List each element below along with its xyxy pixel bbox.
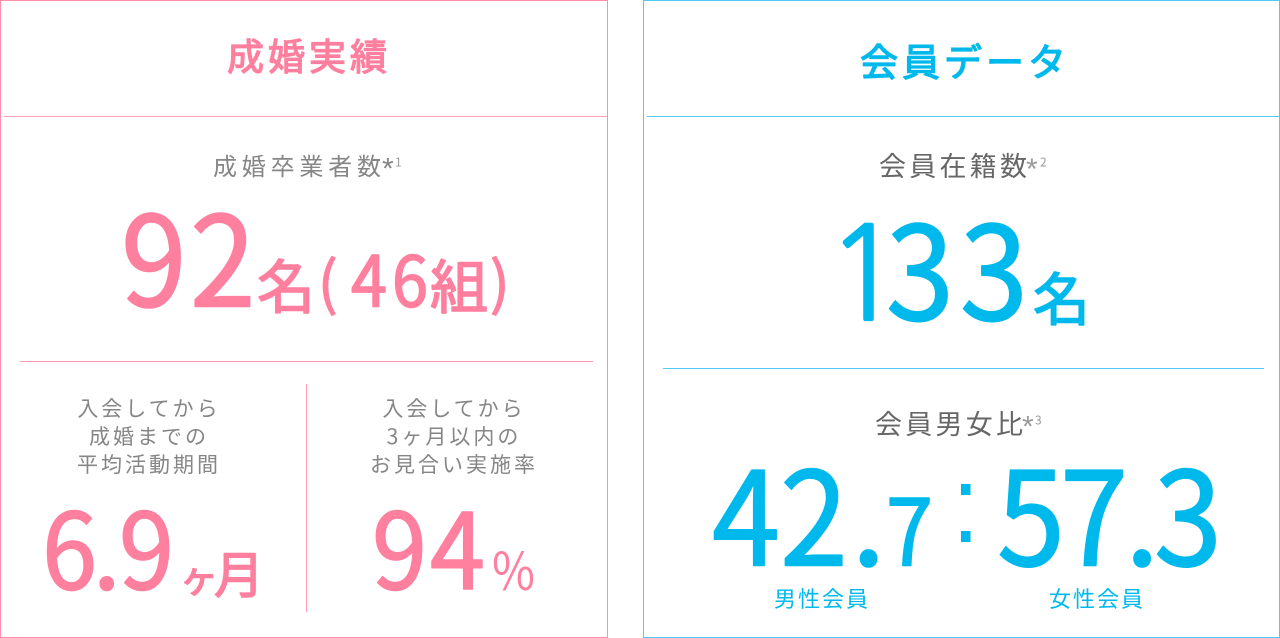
- stat: 92名(46組): 名: [257, 241, 315, 325]
- label: 平均活動期間: [77, 393, 221, 479]
- stat: 92名(46組): [121, 162, 510, 342]
- stat: 133名: 3: [960, 170, 1028, 358]
- label: お見合い実施率: 3ヶ月以内の: [387, 421, 521, 451]
- stat: 57.3 female ratio: 7: [1060, 416, 1128, 604]
- stat: 6.9ヶ月: 9: [119, 468, 174, 620]
- label: 会員在籍数: *: [1026, 153, 1038, 186]
- label: 会員在籍数: 会員在籍数: [879, 145, 1027, 184]
- stat: 92名(46組): 6: [392, 226, 428, 328]
- stat: 6.9ヶ月: ヶ: [180, 548, 218, 603]
- stat: 57.3 female ratio: .: [1125, 424, 1159, 602]
- stat: 133名: 名: [1033, 255, 1090, 337]
- stat: 57.3 female ratio: 5: [997, 416, 1065, 604]
- stat: 94%: [372, 468, 535, 620]
- stat: 92名(46組): 2: [190, 162, 256, 342]
- heading: 会員データ: 会員データ: [860, 32, 1066, 87]
- stat: 94%: 4: [430, 468, 485, 620]
- panel: 会員データ: [644, 0, 1280, 638]
- stat: 42.7 male ratio: 2: [780, 416, 848, 604]
- label: 平均活動期間: 成婚までの: [89, 421, 209, 451]
- label: 成婚卒業者数: 1: [395, 154, 402, 170]
- label: 平均活動期間: 平均活動期間: [77, 449, 221, 479]
- label: 男性会員: 男性会員: [774, 582, 868, 614]
- stat: 6.9ヶ月: [42, 468, 264, 620]
- label: 平均活動期間: 入会してから: [77, 393, 221, 423]
- stat: 94%: %: [492, 530, 535, 605]
- stat: 57.3 female ratio: [997, 416, 1222, 604]
- label: 成婚卒業者数: 成婚卒業者数: [213, 147, 381, 182]
- stat: 57.3 female ratio: 3: [1154, 416, 1222, 604]
- stat: 6.9ヶ月: 月: [214, 536, 264, 608]
- heading: 成婚実績: 成婚実績: [227, 27, 387, 81]
- stat: 6.9ヶ月: 6: [42, 468, 97, 620]
- label: 会員在籍数: 2: [1040, 154, 1047, 170]
- stat: 133名: [825, 170, 1090, 358]
- stat: 92名(46組): ): [490, 237, 510, 321]
- stat: 6.9ヶ月: .: [93, 474, 121, 618]
- label: 会員男女比: *: [1022, 411, 1034, 444]
- ratio colon: [961, 484, 970, 542]
- stat: 133名: 3: [886, 170, 954, 358]
- stat: 133名: 1: [825, 209, 904, 339]
- stat: 42.7 male ratio: .: [852, 424, 886, 602]
- stat: 92名(46組): (: [318, 237, 338, 321]
- stat: 42.7 male ratio: 4: [712, 416, 780, 604]
- stat: 92名(46組): 9: [121, 162, 186, 342]
- stat: 42.7 male ratio: [712, 416, 933, 604]
- label: 成婚卒業者数: *: [382, 153, 394, 186]
- label: 会員男女比: 3: [1035, 412, 1042, 428]
- stat: 42.7 male ratio: 7: [886, 460, 933, 592]
- label: お見合い実施率: お見合い実施率: [370, 449, 538, 479]
- stat: 92名(46組): 4: [351, 226, 387, 328]
- label: お見合い実施率: [370, 393, 538, 479]
- label: 女性会員: 女性会員: [1049, 582, 1143, 614]
- label: お見合い実施率: 入会してから: [382, 393, 526, 423]
- stat: 92名(46組): 組: [430, 241, 488, 325]
- label: 会員男女比: 会員男女比: [875, 403, 1023, 442]
- panel: 成婚実績: [0, 0, 608, 638]
- stat: 94%: 9: [372, 468, 427, 620]
